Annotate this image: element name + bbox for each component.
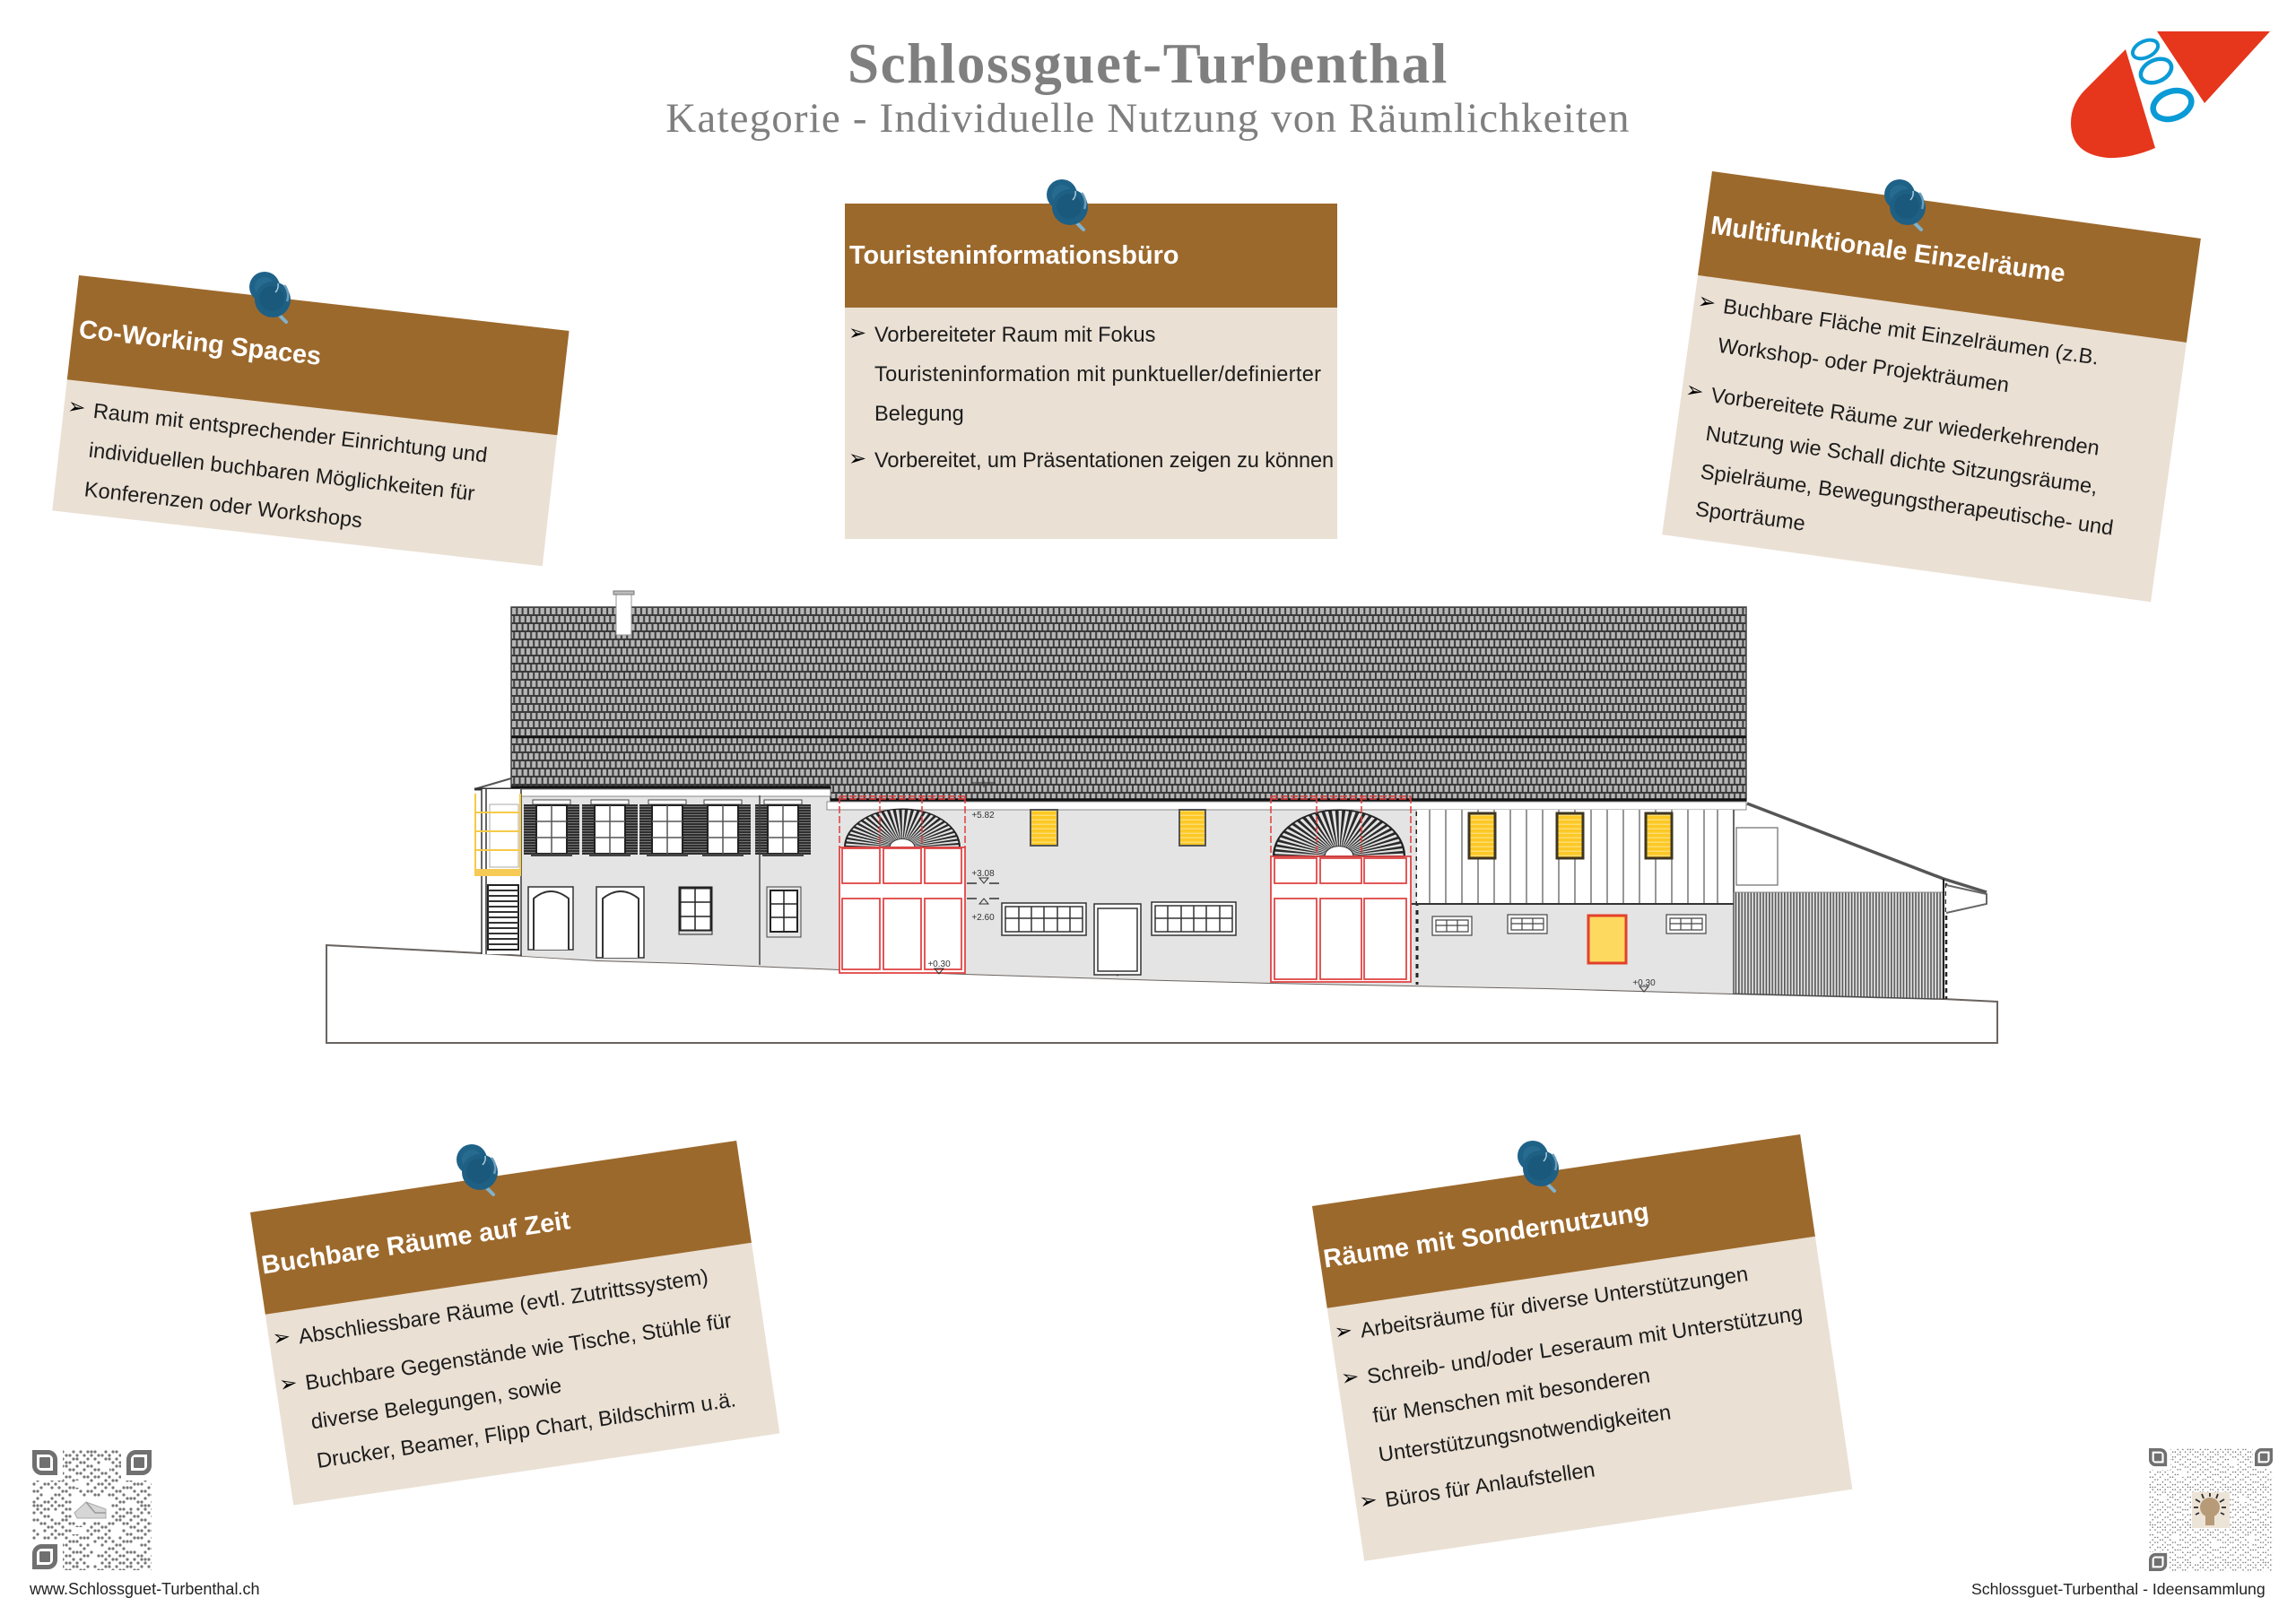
text line: Unterstützungsnotwendigkeiten bbox=[1377, 1401, 1673, 1467]
panel: Touristeninformationsbüro bbox=[845, 204, 1337, 539]
side stair and yellow scaffold bbox=[475, 789, 522, 956]
text line: Buchbare Fläche mit Einzelräumen (z.B. bbox=[1722, 295, 2100, 370]
level markers: +3.08 bbox=[971, 869, 995, 879]
text line: Buchbare Gegenstände wie Tische, Stühle für bbox=[304, 1309, 733, 1395]
heading: Co-Working Spaces bbox=[67, 275, 569, 435]
icon: pin special use bbox=[1518, 1141, 1559, 1191]
footer: ideas collection: Schlossguet-Turbenthal - Ideensammlung bbox=[1971, 1580, 2266, 1598]
panel: Räume mit Sondernutzung bbox=[1312, 1134, 1852, 1561]
heading: Touristeninformationsbüro bbox=[845, 204, 1337, 308]
text line: Touristeninformation mit punktueller/definierter bbox=[874, 363, 1321, 386]
icon: pin rooms for hire bbox=[457, 1144, 498, 1194]
heading: Multifunktionale Einzelräume: Multifunktionale Einzelräume bbox=[1709, 212, 2067, 289]
panel: Räume mit Sondernutzung: ➢ bbox=[1339, 1364, 1361, 1391]
level markers: +5.82 bbox=[971, 811, 995, 821]
icon: pin co-working bbox=[249, 272, 291, 322]
text line: Büros für Anlaufstellen bbox=[1384, 1458, 1596, 1512]
upper windows with shutters bbox=[524, 800, 811, 856]
ground line and base bbox=[326, 945, 1997, 1043]
level markers: +0.30 bbox=[927, 960, 951, 969]
panel: Buchbare Räume auf Zeit: ➢ bbox=[271, 1324, 292, 1351]
panel: Co-Working Spaces bbox=[52, 275, 569, 566]
annex with corrugated wall bbox=[1734, 803, 1987, 999]
heading: Buchbare Räume auf Zeit bbox=[250, 1141, 752, 1315]
icon: pin multifunctional bbox=[1884, 179, 1926, 230]
text line: Abschliessbare Räume (evtl. Zutrittssystem) bbox=[297, 1265, 709, 1349]
text line: Workshop- oder Projekträumen bbox=[1717, 334, 2011, 397]
icon: pin tourist office bbox=[1047, 179, 1088, 230]
downspout bbox=[1415, 812, 1419, 985]
icon: logo bbox=[2071, 31, 2270, 158]
right section boarded facade bbox=[1412, 810, 1734, 994]
wall joint bbox=[759, 795, 761, 965]
text line: Vorbereiteter Raum mit Fokus bbox=[874, 324, 1155, 347]
panel: Multifunktionale Einzelräume: ➢ bbox=[1684, 377, 1705, 404]
panel: Räume mit Sondernutzung: ➢ bbox=[1333, 1317, 1354, 1345]
yellow upper windows right bbox=[1469, 813, 1672, 858]
level markers: +0.30 bbox=[1632, 978, 1656, 988]
level markers: +0.23 bbox=[1106, 961, 1129, 971]
panel: Buchbare Räume auf Zeit bbox=[250, 1141, 779, 1505]
text line: individuellen buchbaren Möglichkeiten für bbox=[88, 439, 476, 506]
footer: website: www.Schlossguet-Turbenthal.ch bbox=[30, 1580, 259, 1598]
yellow upper windows middle bbox=[1031, 810, 1205, 846]
text line: für Menschen mit besonderen bbox=[1371, 1364, 1652, 1428]
text line: Spielräume, Bewegungstherapeutische- und bbox=[1699, 461, 2115, 541]
walls bbox=[522, 795, 1734, 994]
heading: Buchbare Räume auf Zeit: Buchbare Räume auf Zeit bbox=[260, 1206, 572, 1281]
text line: Schreib- und/oder Leseraum mit Unterstützung bbox=[1366, 1302, 1805, 1389]
text line: Belegung bbox=[874, 403, 964, 426]
text line: Konferenzen oder Workshops bbox=[83, 478, 363, 533]
subtitle: Kategorie - Individuelle Nutzung von Räumlichkeiten bbox=[665, 95, 1631, 142]
text line: Nutzung wie Schall dichte Sitzungsräume, bbox=[1704, 422, 2099, 499]
icon: QR code ideas collection bbox=[2149, 1448, 2273, 1572]
red barn door 2 bbox=[1271, 796, 1411, 982]
panel: Co-Working Spaces: ➢ bbox=[66, 394, 87, 421]
chimney bbox=[613, 591, 634, 635]
panel: Buchbare Räume auf Zeit: ➢ bbox=[277, 1370, 299, 1397]
yellow door with red frame bbox=[1588, 916, 1626, 963]
heading: Multifunktionale Einzelräume bbox=[1698, 171, 2201, 343]
right lower windows bbox=[1432, 915, 1706, 935]
icon: QR code website bbox=[32, 1450, 152, 1570]
panel: Räume mit Sondernutzung: ➢ bbox=[1358, 1487, 1379, 1515]
panel: Multifunktionale Einzelräume: ➢ bbox=[1696, 288, 1718, 316]
text line: Sporträume bbox=[1694, 498, 1806, 536]
text line: Arbeitsräume für diverse Unterstützungen bbox=[1359, 1263, 1750, 1343]
text line: Vorbereitet, um Präsentationen zeigen zu können bbox=[874, 449, 1334, 473]
title: Schlossguet-Turbenthal bbox=[848, 32, 1448, 95]
ground floor arched doors bbox=[528, 887, 644, 958]
middle ground floor windows and door bbox=[1002, 902, 1236, 975]
heading: Co-Working Spaces: Co-Working Spaces bbox=[77, 316, 323, 371]
ground floor windows left bbox=[679, 887, 801, 937]
roof bbox=[474, 607, 1746, 810]
text line: Raum mit entsprechender Einrichtung und bbox=[92, 400, 489, 467]
panel: Multifunktionale Einzelräume bbox=[1662, 171, 2201, 602]
red barn door 1 bbox=[839, 796, 965, 973]
level markers: +2.60 bbox=[971, 913, 995, 923]
level markers bbox=[927, 780, 1656, 992]
panel: Touristeninformationsbüro: ➢ bbox=[848, 446, 866, 471]
text line: Vorbereitete Räume zur wiederkehrenden bbox=[1709, 384, 2100, 461]
heading: Touristeninformationsbüro: Touristeninformationsbüro bbox=[849, 240, 1178, 269]
panel: Touristeninformationsbüro: ➢ bbox=[848, 320, 866, 345]
text line: Drucker, Beamer, Flipp Chart, Bildschirm u.ä. bbox=[316, 1388, 737, 1473]
heading: Räume mit Sondernutzung bbox=[1312, 1134, 1815, 1308]
heading: Räume mit Sondernutzung: Räume mit Sondernutzung bbox=[1322, 1198, 1651, 1274]
text line: diverse Belegungen, sowie bbox=[309, 1375, 563, 1434]
